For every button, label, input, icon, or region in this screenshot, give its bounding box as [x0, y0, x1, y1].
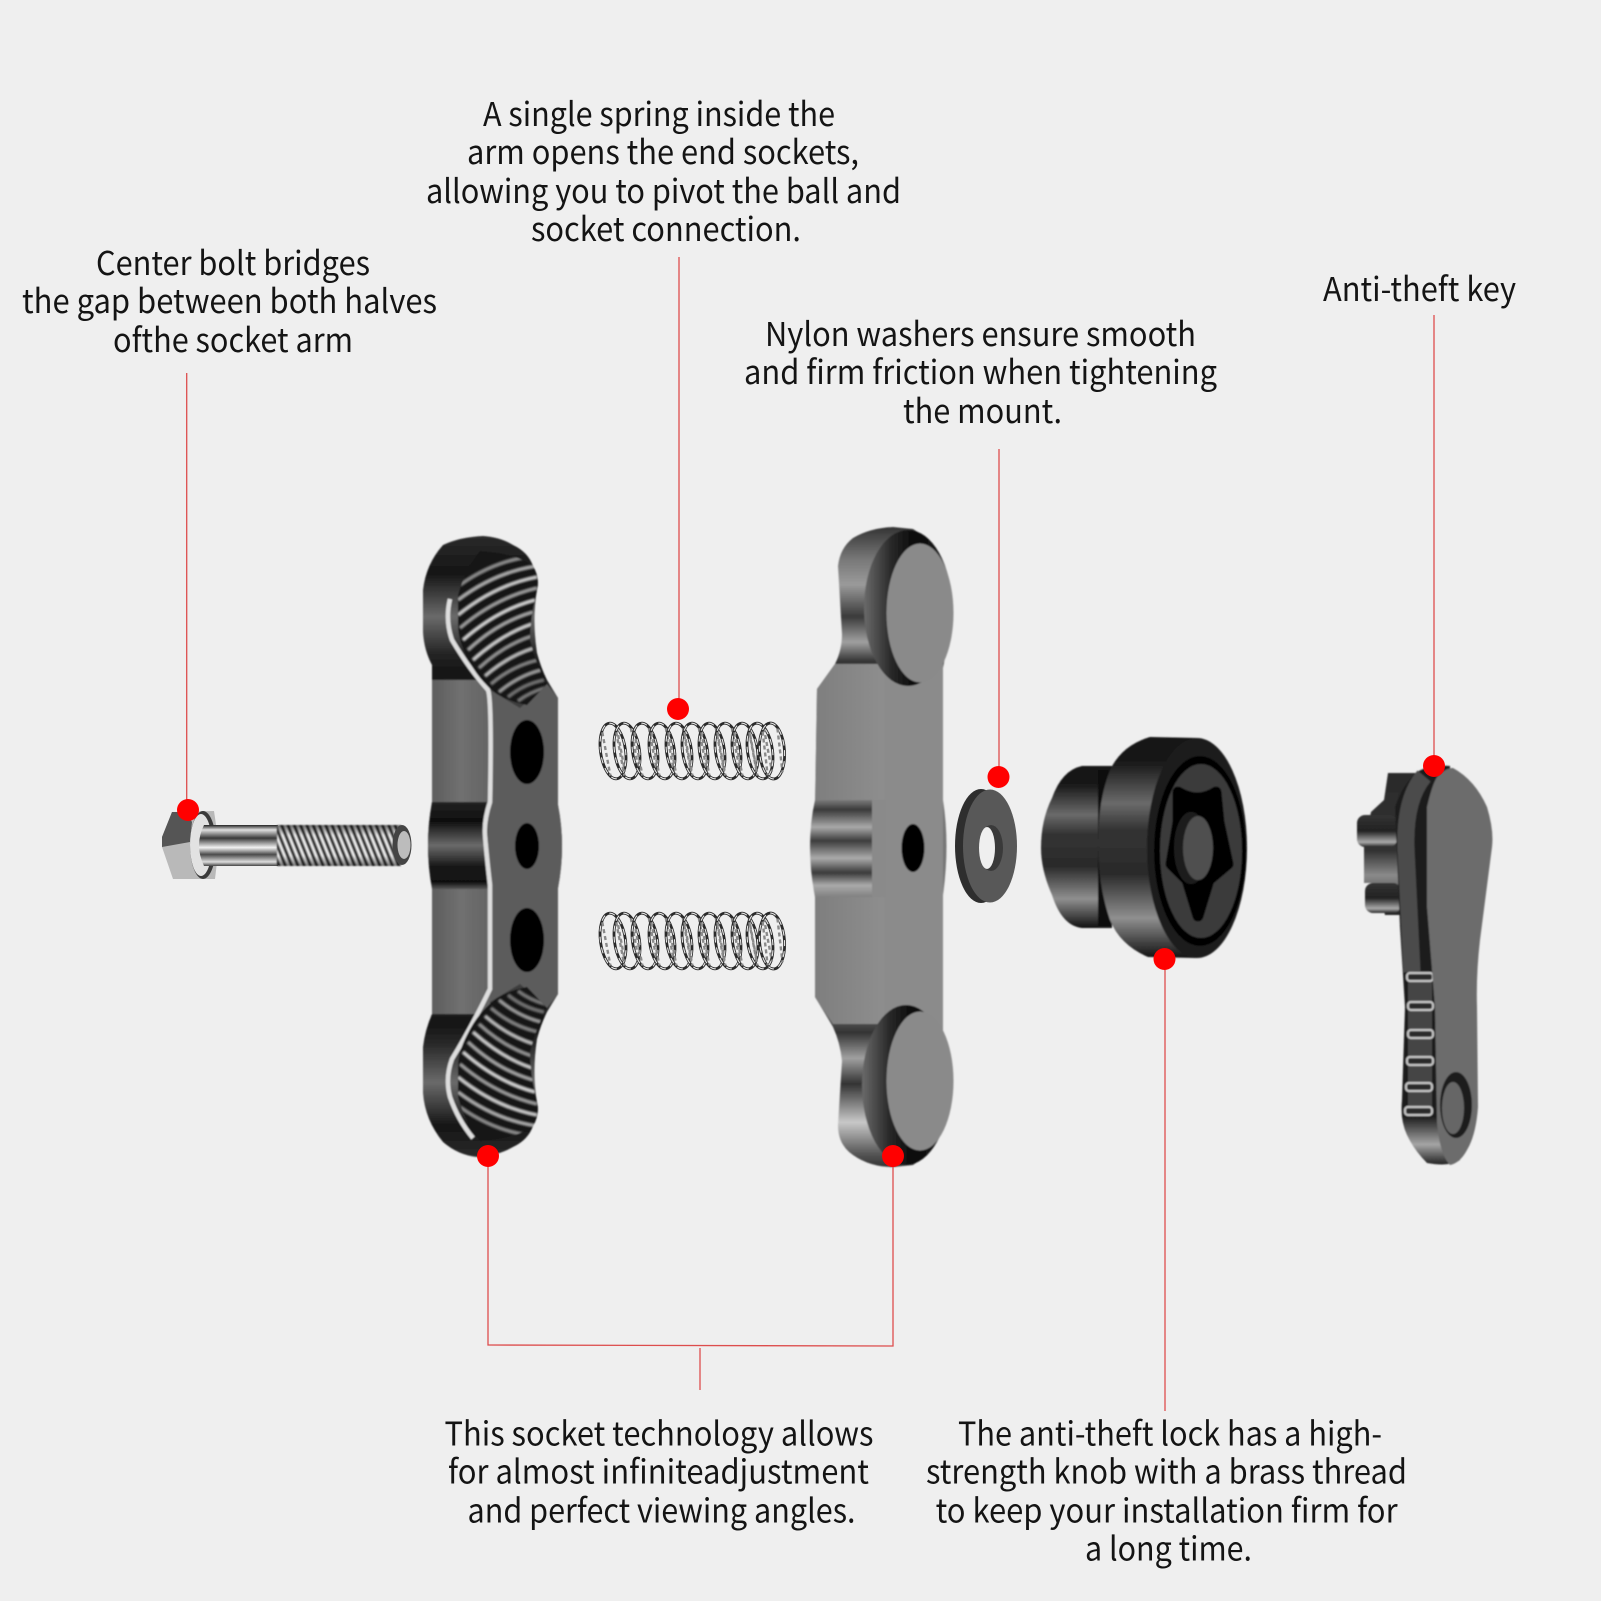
right arm plate [884, 660, 943, 1032]
left arm lower panel [432, 889, 490, 1014]
key lit strip [1406, 776, 1424, 972]
callout: spring: arm opens the end sockets, [467, 126, 859, 174]
knob shadow groove [1098, 770, 1112, 926]
left arm hole bottom [510, 908, 544, 972]
callout: center bolt [22, 237, 437, 362]
callout: spring: allowing you to pivot the ball and [426, 165, 901, 213]
callout: anti-theft lock: to keep your installation firm for [936, 1484, 1398, 1532]
right arm hole [902, 824, 924, 872]
knob small cylinder [1041, 766, 1112, 928]
right arm top cap ring [864, 530, 952, 686]
bolt thread [277, 825, 401, 866]
washer side [955, 789, 1007, 903]
callout: anti-theft lock: strength knob with a brass thread [926, 1446, 1407, 1494]
callout: center bolt: ofthe socket arm [113, 314, 353, 362]
callout: center bolt: the gap between both halves [22, 275, 437, 323]
callout: socket technology: and perfect viewing angles. [468, 1484, 856, 1532]
callout: anti-theft key: Anti-theft key [1323, 263, 1516, 311]
spring bottom [597, 912, 786, 970]
bolt hex head [162, 811, 219, 879]
marker dots [177, 698, 1445, 1167]
right arm top cap disk [886, 544, 954, 682]
callout: socket technology: This socket technology allows [444, 1408, 874, 1456]
part: anti-theft lock knob [1041, 737, 1247, 958]
right arm centre band [810, 800, 878, 897]
left arm highlight edge [448, 599, 491, 1138]
callout: socket technology [444, 1408, 874, 1532]
callout: spring: socket connection. [531, 203, 801, 251]
callout: center bolt: Center bolt bridges [96, 237, 370, 285]
part: right socket arm half [810, 527, 954, 1167]
callout: nylon washers: Nylon washers ensure smooth [765, 308, 1196, 356]
knob front rim [1147, 738, 1247, 958]
callout: nylon washers [744, 308, 1217, 433]
right arm bottom cap disk [886, 1012, 954, 1150]
key ridges [1405, 973, 1433, 1115]
knob front face [1160, 764, 1242, 938]
bolt tip [392, 825, 412, 865]
right arm silhouette [810, 527, 953, 1167]
left arm upper panel [432, 680, 489, 802]
part: springs [597, 722, 786, 970]
bolt washer [190, 811, 216, 879]
callout: anti-theft lock: The anti-theft lock has a high- [958, 1408, 1382, 1456]
key back body [1395, 766, 1460, 1164]
knob large cylinder [1098, 737, 1197, 958]
callout: anti-theft lock: a long time. [1085, 1522, 1252, 1570]
left arm top socket [458, 551, 547, 705]
callout: nylon washers: the mount. [903, 385, 1062, 433]
left arm silhouette [423, 536, 562, 1157]
knob front ring [1154, 756, 1246, 946]
knob five-lobe key socket [1171, 792, 1228, 916]
left arm inner face [488, 684, 562, 1008]
callout: spring: A single spring inside the [483, 88, 835, 136]
left arm hole middle [515, 823, 539, 869]
callout: socket technology: for almost infiniteadjustment [448, 1446, 869, 1494]
left arm centre band [428, 802, 488, 889]
part: center bolt [162, 811, 412, 879]
right arm panel [810, 664, 885, 1024]
right arm bottom cap ring [862, 1005, 950, 1165]
washer hole [979, 825, 1003, 871]
washer front [963, 790, 1017, 902]
bolt shaft [199, 825, 278, 866]
part: anti-theft key [1357, 766, 1492, 1165]
key hole [1440, 1072, 1472, 1138]
left arm bottom socket [458, 987, 547, 1141]
knob centre pin [1174, 812, 1208, 884]
callout: nylon washers: and firm friction when tightening [744, 346, 1217, 394]
spring top [597, 722, 786, 780]
callout: spring [426, 88, 901, 251]
part: nylon washer [955, 789, 1017, 903]
key grey face [1427, 768, 1492, 1165]
leader lines [187, 257, 1434, 1411]
key teeth [1357, 773, 1418, 915]
part: left socket arm half [423, 536, 562, 1157]
callout: anti-theft lock [926, 1408, 1407, 1570]
left arm hole top [510, 720, 544, 784]
